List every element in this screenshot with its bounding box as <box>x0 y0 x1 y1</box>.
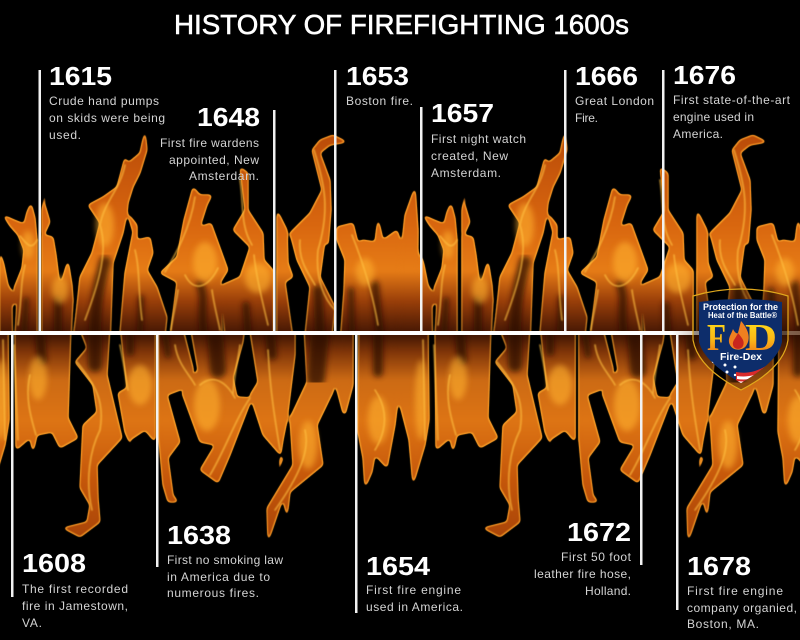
event 1666: Great London <box>575 94 654 108</box>
event 1638: First no smoking law <box>167 553 283 567</box>
event 1678: First fire engine <box>687 584 783 598</box>
badge: Fire-Dex shield: Fire-Dex <box>720 351 762 363</box>
badge: Fire-Dex shield: Heat of the Battle® <box>708 310 778 320</box>
event 1638: 1638 <box>167 520 231 550</box>
event 1666 <box>564 61 654 331</box>
event 1678 <box>676 335 797 631</box>
event 1676: 1676 <box>673 60 736 90</box>
event 1608: fire in Jamestown, <box>22 599 128 613</box>
event 1672: leather fire hose, <box>534 567 631 581</box>
event 1608: 1608 <box>22 548 86 578</box>
event 1653: Boston fire. <box>346 94 413 108</box>
event 1615: 1615 <box>49 61 112 91</box>
event 1666: 1666 <box>575 61 638 91</box>
event 1672: First 50 foot <box>561 550 632 564</box>
event 1678: Boston, MA. <box>687 617 759 631</box>
event 1638: in America due to <box>167 570 270 584</box>
event 1648 <box>160 102 276 331</box>
event 1608: The first recorded <box>22 582 128 596</box>
upper flame band <box>0 130 800 345</box>
event 1653: 1653 <box>346 61 409 91</box>
event 1657: Amsterdam. <box>431 166 501 180</box>
badge: Fire-Dex shield: Protection for the <box>703 302 778 312</box>
event 1672: 1672 <box>567 517 631 547</box>
event 1678: 1678 <box>687 551 751 581</box>
badge: Fire-Dex shield: F <box>707 317 726 359</box>
event 1654: used in America. <box>366 600 463 614</box>
event 1654: First fire engine <box>366 583 461 597</box>
title: HISTORY OF FIREFIGHTING 1600s <box>174 9 629 40</box>
event 1615: on skids were being <box>49 111 165 125</box>
event 1648: First fire wardens <box>160 136 259 150</box>
event 1676 <box>662 60 791 331</box>
badge: Fire-Dex shield <box>693 289 788 390</box>
event 1638: numerous fires. <box>167 586 259 600</box>
timeline axis <box>0 331 800 335</box>
event 1672 <box>534 335 642 598</box>
event 1615: used. <box>49 128 81 142</box>
event 1676: engine used in <box>673 110 754 124</box>
event 1648: 1648 <box>197 102 260 132</box>
event 1648: Amsterdam. <box>189 169 259 183</box>
event 1666: Fire. <box>575 111 598 125</box>
event 1657: 1657 <box>431 98 494 128</box>
event 1654 <box>355 335 463 614</box>
event 1653 <box>334 61 413 331</box>
event 1657 <box>420 98 526 331</box>
event 1648: appointed, New <box>169 153 259 167</box>
event 1657: created, New <box>431 149 508 163</box>
event 1657: First night watch <box>431 132 526 146</box>
event 1654: 1654 <box>366 551 431 581</box>
event 1672: Holland. <box>585 584 631 598</box>
event 1638 <box>156 335 283 600</box>
lower flame band <box>0 325 800 542</box>
event 1676: First state-of-the-art <box>673 93 791 107</box>
event 1676: America. <box>673 127 723 141</box>
event 1608: VA. <box>22 616 42 630</box>
event 1615: Crude hand pumps <box>49 94 159 108</box>
event 1615 <box>38 61 165 331</box>
badge: Fire-Dex shield: D <box>745 317 777 359</box>
event 1608 <box>11 335 128 630</box>
event 1678: company organied, <box>687 601 797 615</box>
